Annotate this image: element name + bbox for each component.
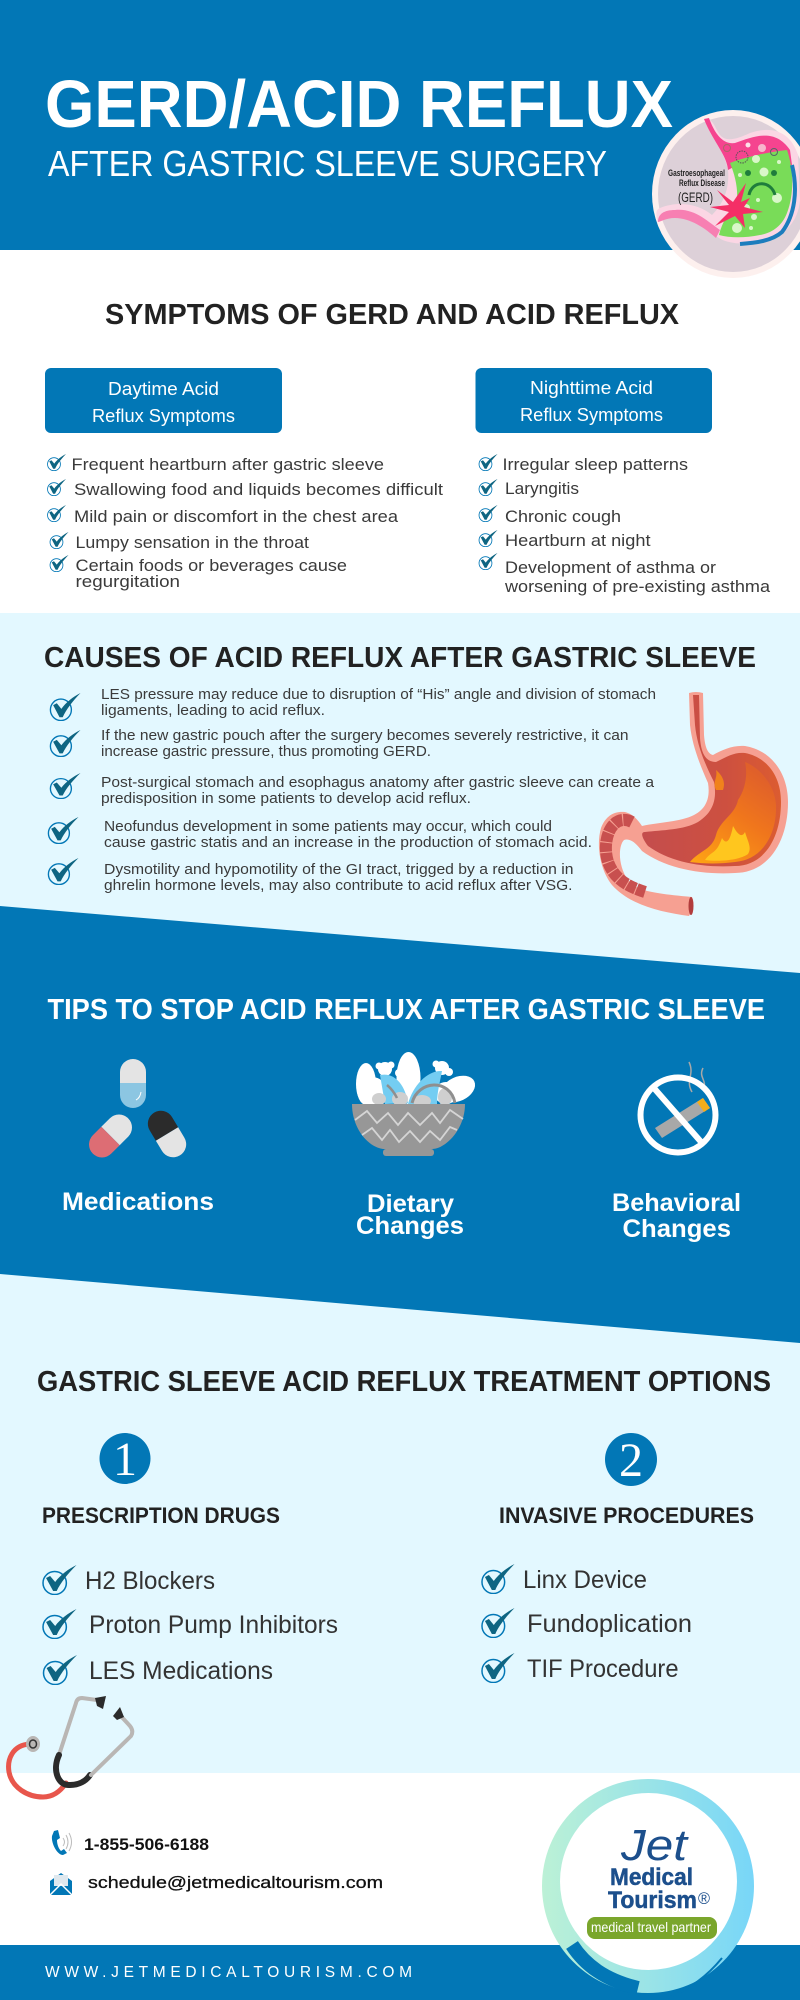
panel: prescription drugs: LES Medications bbox=[89, 1657, 273, 1685]
cause 5: Dysmotility and hypomotility of the GI tract, trigged by a reduction in bbox=[104, 861, 574, 878]
tip labels: Medications bbox=[62, 1188, 214, 1216]
panel: daytime symptoms: Daytime Acid bbox=[108, 378, 219, 399]
cause 1: ligaments, leading to acid reflux. bbox=[101, 702, 325, 719]
logo wordmark: Jet bbox=[620, 1821, 689, 1870]
daytime list bbox=[48, 454, 66, 471]
cause 3: Post-surgical stomach and esophagus anatomy after gastric sleeve can create a bbox=[101, 774, 655, 791]
subheading: PRESCRIPTION DRUGS bbox=[42, 1503, 280, 1528]
panel: nighttime symptoms: Chronic cough bbox=[505, 507, 621, 526]
number badge 1: 1 bbox=[113, 1433, 137, 1486]
tip labels: Dietary bbox=[367, 1190, 454, 1218]
icon: GERD stomach badge: Reflux Disease bbox=[679, 178, 725, 188]
icon: salad bowl bbox=[352, 1052, 479, 1156]
daytime header box bbox=[45, 368, 282, 433]
panel: daytime symptoms bbox=[45, 368, 443, 591]
panel: daytime symptoms: regurgitation bbox=[76, 572, 180, 591]
panel: nighttime symptoms: Laryngitis bbox=[505, 479, 579, 498]
heading: treatment options: GASTRIC SLEEVE ACID REFLUX TREATMENT OPTIONS bbox=[37, 1366, 771, 1398]
icon: GERD stomach badge: (GERD) bbox=[678, 189, 713, 205]
icon: envelope bbox=[50, 1873, 72, 1895]
cause 2: If the new gastric pouch after the surgery becomes severely restrictive, it can bbox=[101, 727, 628, 744]
tips diagonal band bbox=[0, 906, 800, 1343]
panel: nighttime symptoms: Irregular sleep patterns bbox=[502, 455, 688, 474]
illustration: stomach with flames bbox=[599, 692, 788, 916]
drug list bbox=[43, 1565, 76, 1594]
panel: invasive procedures: Fundoplication bbox=[527, 1610, 692, 1638]
icon: no smoking bbox=[640, 1062, 716, 1152]
footer band bbox=[0, 1945, 800, 2000]
logo tagline pill bbox=[587, 1917, 717, 1939]
subheading: INVASIVE PROCEDURES bbox=[499, 1503, 754, 1528]
title: GERD/ACID REFLUX bbox=[45, 67, 673, 142]
contact: phone: 1-855-506-6188 bbox=[84, 1835, 209, 1854]
logo: Jet Medical Tourism: Tourism bbox=[608, 1887, 697, 1914]
logo: Jet Medical Tourism: ® bbox=[698, 1889, 710, 1908]
panel: daytime symptoms: Swallowing food and liquids becomes difficult bbox=[74, 480, 443, 499]
panel: invasive procedures bbox=[482, 1433, 754, 1683]
heading: causes: CAUSES OF ACID REFLUX AFTER GASTRIC SLEEVE bbox=[44, 642, 756, 674]
cause 5: ghrelin hormone levels, may also contribute to acid reflux after VSG. bbox=[104, 877, 572, 894]
panel: invasive procedures: TIF Procedure bbox=[527, 1655, 678, 1683]
cause 4 bbox=[48, 817, 592, 851]
logo: Jet Medical Tourism: Medical bbox=[610, 1864, 693, 1891]
panel: nighttime symptoms: Reflux Symptoms bbox=[520, 404, 663, 425]
panel: nighttime symptoms: Development of asthma or bbox=[505, 558, 716, 577]
cause 4: Neofundus development in some patients may occur, which could bbox=[104, 818, 552, 835]
panel: invasive procedures: Linx Device bbox=[523, 1566, 647, 1594]
cause 2: increase gastric pressure, thus promoting GERD. bbox=[101, 743, 431, 760]
number badge 1 bbox=[100, 1433, 150, 1486]
icon: phone bbox=[52, 1830, 72, 1855]
number badge 2: 2 bbox=[619, 1434, 643, 1487]
sad face bbox=[745, 170, 777, 195]
cause 3: predisposition in some patients to develop acid reflux. bbox=[101, 790, 471, 807]
contact: email bbox=[50, 1873, 383, 1895]
contact: phone bbox=[52, 1830, 209, 1855]
panel: nighttime symptoms: worsening of pre-existing asthma bbox=[504, 577, 771, 596]
heading: symptoms: SYMPTOMS OF GERD AND ACID REFLUX bbox=[105, 299, 680, 331]
cause 4: cause gastric statis and an increase in the production of stomach acid. bbox=[104, 834, 592, 851]
causes and treatment light background bbox=[0, 613, 800, 1773]
cause 5 bbox=[48, 858, 574, 894]
panel: nighttime symptoms: Nighttime Acid bbox=[530, 377, 653, 398]
tip labels: Changes bbox=[356, 1212, 464, 1240]
footer website: WWW.JETMEDICALTOURISM.COM bbox=[45, 1964, 412, 1981]
panel: prescription drugs: Proton Pump Inhibitors bbox=[89, 1611, 338, 1639]
panel: daytime symptoms: Reflux Symptoms bbox=[92, 405, 235, 426]
flames bbox=[690, 762, 776, 864]
cause 1 bbox=[50, 686, 656, 721]
stomach bubbles bbox=[732, 155, 782, 233]
number badge 2 bbox=[605, 1433, 657, 1487]
panel: prescription drugs bbox=[42, 1433, 338, 1685]
heading: tips: TIPS TO STOP ACID REFLUX AFTER GASTRIC SLEEVE bbox=[48, 994, 765, 1026]
panel: nighttime symptoms: Heartburn at night bbox=[505, 531, 651, 550]
logo: Jet Medical Tourism bbox=[542, 1779, 754, 1998]
nighttime list bbox=[479, 454, 498, 471]
contact: email: schedule@jetmedicaltourism.com bbox=[88, 1873, 383, 1892]
panel: prescription drugs: H2 Blockers bbox=[85, 1567, 215, 1595]
tip labels: Changes bbox=[622, 1215, 731, 1243]
badge text: Gastroesophageal bbox=[668, 168, 725, 178]
cause 2 bbox=[50, 727, 629, 760]
tip labels bbox=[62, 1188, 741, 1243]
panel: causes list bbox=[48, 686, 656, 894]
header band bbox=[0, 0, 800, 250]
pain star bbox=[710, 183, 763, 228]
procedure list bbox=[482, 1564, 514, 1594]
icon: GERD stomach badge bbox=[652, 110, 800, 278]
cause 1: LES pressure may reduce due to disruption of “His” angle and division of stomach bbox=[101, 686, 656, 703]
panel: nighttime symptoms bbox=[476, 368, 771, 596]
subtitle: AFTER GASTRIC SLEEVE SURGERY bbox=[48, 143, 607, 184]
panel: daytime symptoms: Lumpy sensation in the throat bbox=[76, 533, 309, 552]
panel: daytime symptoms: Frequent heartburn after gastric sleeve bbox=[72, 455, 384, 474]
logo: Jet Medical Tourism: medical travel partner bbox=[591, 1919, 711, 1935]
cause 3 bbox=[50, 773, 655, 807]
nighttime header box bbox=[476, 368, 712, 433]
icon: medication capsules bbox=[84, 1059, 191, 1163]
icon: stethoscope bbox=[9, 1696, 132, 1797]
panel: daytime symptoms: Certain foods or beverages cause bbox=[76, 556, 347, 575]
panel: daytime symptoms: Mild pain or discomfort in the chest area bbox=[74, 507, 399, 526]
tip labels: Behavioral bbox=[612, 1189, 741, 1217]
